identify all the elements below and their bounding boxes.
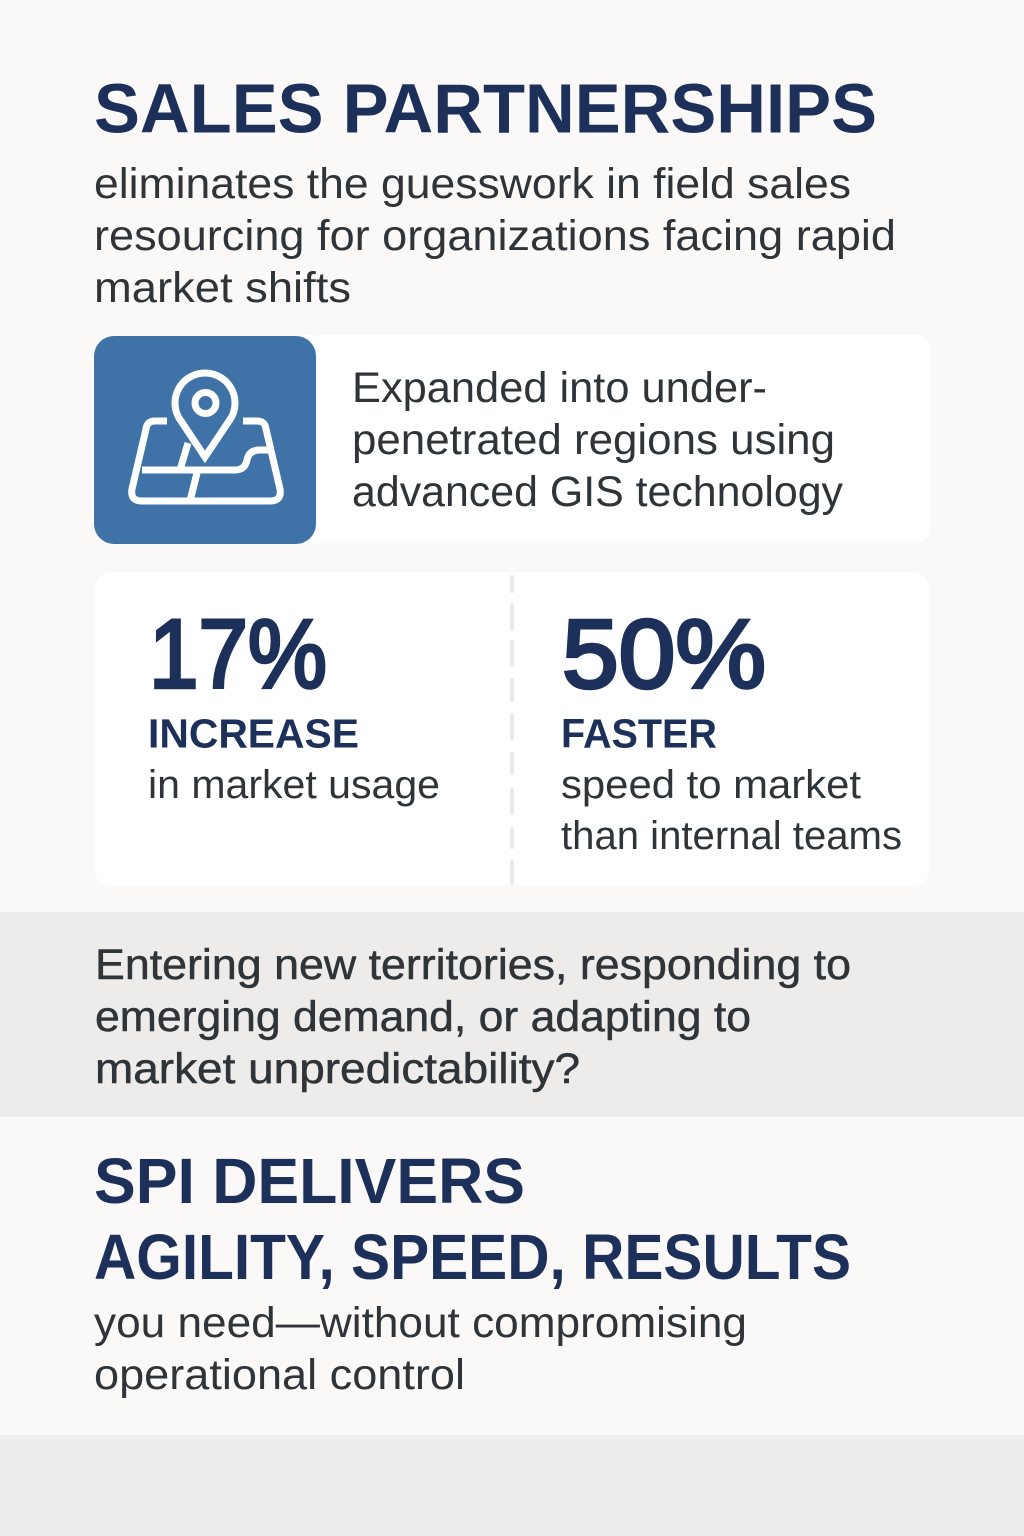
- title: SALES PARTNERSHIPS: [94, 70, 877, 148]
- stat: 50% faster: FASTER: [561, 710, 717, 756]
- closing text block: [94, 1299, 747, 1399]
- panel: question band: emerging demand, or adapting to: [95, 993, 751, 1041]
- subtitle text block: market shifts: [94, 264, 351, 312]
- closing heading: SPI DELIVERS: [94, 1145, 525, 1217]
- stat: 50% faster: than internal teams: [561, 814, 902, 858]
- GIS expansion text: penetrated regions using: [352, 416, 835, 464]
- panel: GIS expansion: [94, 335, 930, 544]
- GIS expansion text: [352, 364, 843, 516]
- closing heading: AGILITY, SPEED, RESULTS: [94, 1221, 851, 1293]
- stat: 17% increase: in market usage: [148, 763, 440, 807]
- closing text block: you need—without compromising: [94, 1299, 747, 1347]
- stat: 17% increase: 17%: [149, 600, 327, 708]
- panel: statistics: [95, 572, 929, 886]
- stat: 50% faster: 50%: [562, 600, 766, 708]
- stat: 17% increase: [148, 600, 440, 807]
- subtitle text block: resourcing for organizations facing rapid: [94, 212, 896, 260]
- GIS expansion text: advanced GIS technology: [352, 468, 843, 516]
- icon: map with location pin: [94, 336, 316, 544]
- footer band: [0, 1435, 1024, 1536]
- stat: 50% faster: [561, 600, 902, 858]
- stat: 50% faster: speed to market: [561, 763, 861, 807]
- panel: question band: market unpredictability?: [95, 1045, 580, 1093]
- subtitle text block: eliminates the guesswork in field sales: [94, 160, 851, 208]
- closing heading: [94, 1145, 851, 1293]
- panel: question band: Entering new territories, responding to: [95, 941, 851, 989]
- GIS expansion text: Expanded into under-: [352, 364, 767, 412]
- closing text block: operational control: [94, 1351, 465, 1399]
- panel: question band: [0, 912, 1024, 1117]
- subtitle text block: [94, 160, 896, 312]
- stat: 17% increase: INCREASE: [148, 710, 359, 756]
